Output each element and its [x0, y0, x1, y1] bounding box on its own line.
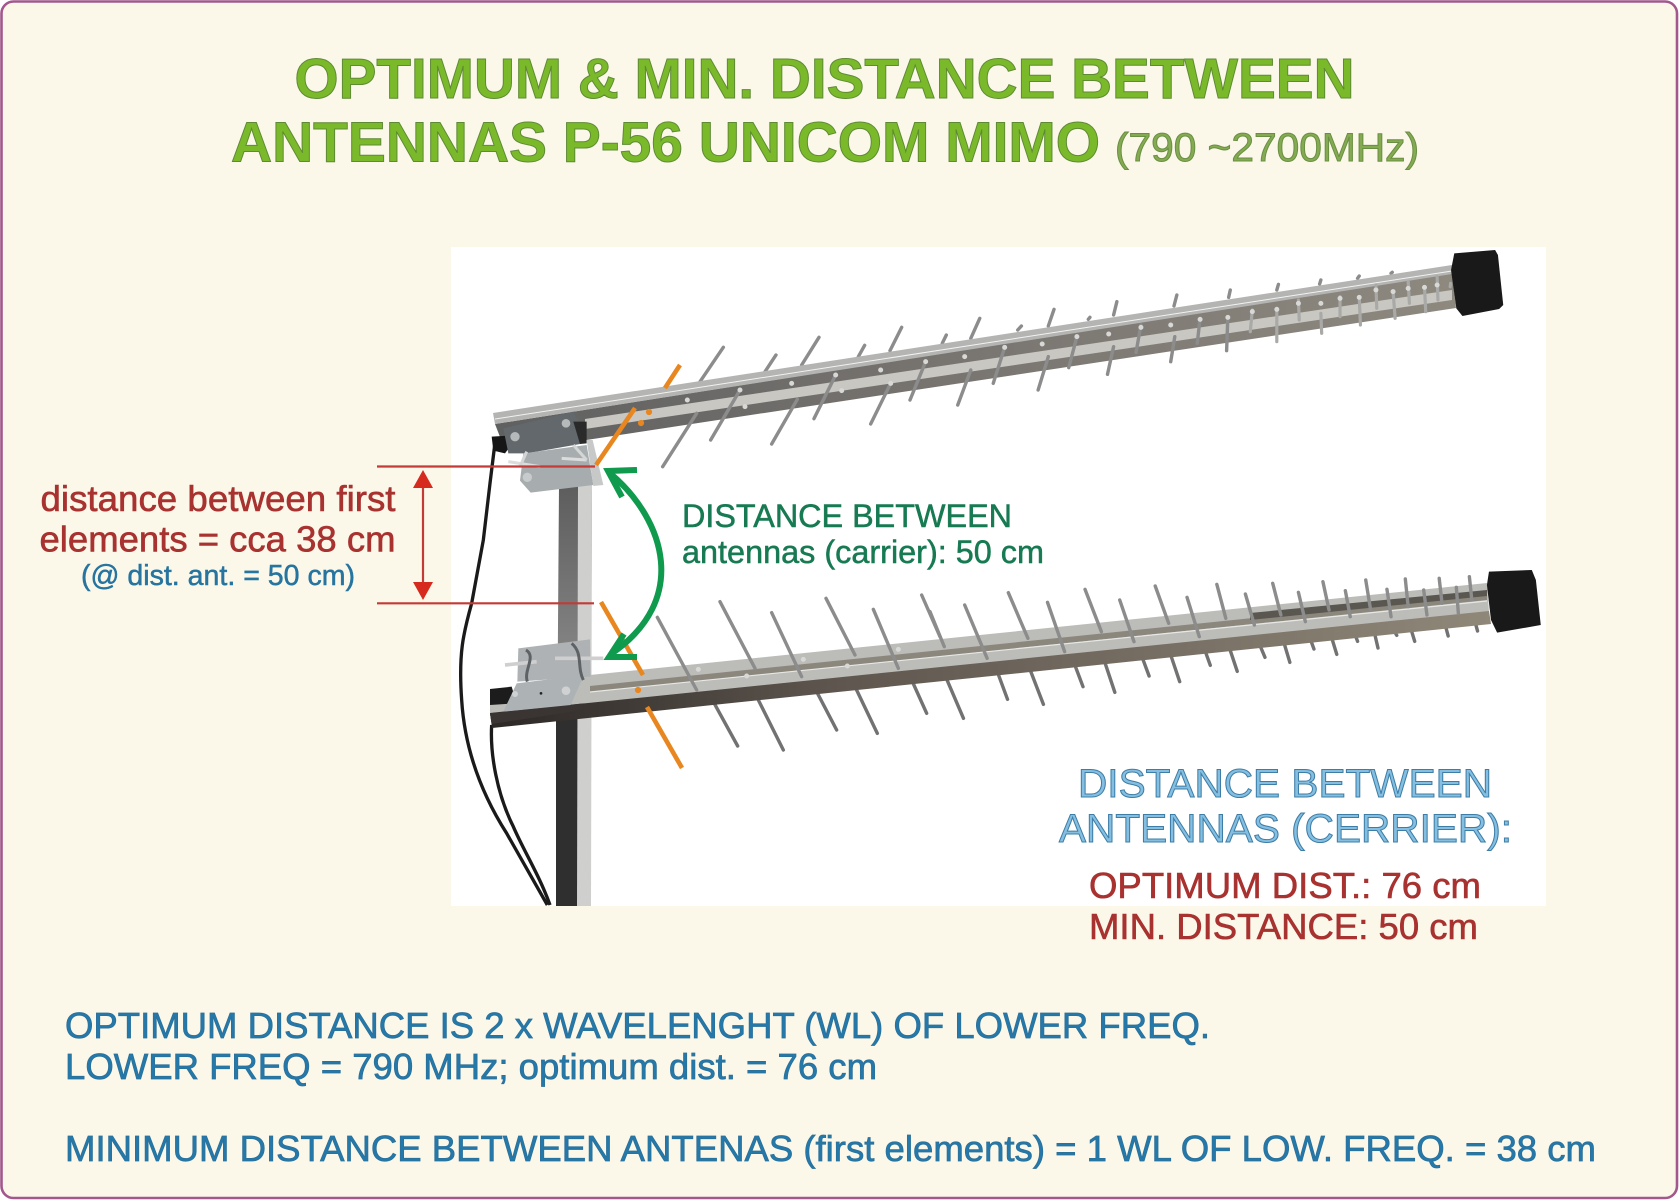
text block: explanation: MINIMUM DISTANCE BETWEEN ANTENAS (first elements) = 1 WL OF LOW. FREQ. = 38 cm: [65, 1128, 1596, 1169]
label: optimum and minimum distance: MIN. DISTANCE: 50 cm: [1089, 906, 1478, 947]
label: distance between antennas carrier: [1059, 762, 1512, 851]
title: (790 ~2700MHz): [1115, 126, 1419, 170]
label: distance between first elements: (@ dist. ant. = 50 cm): [81, 560, 355, 592]
bottom antenna: [490, 570, 1541, 750]
upper elements of bottom antenna: [657, 577, 1472, 690]
front elements of top antenna: [663, 277, 1451, 467]
text block: explanation: OPTIMUM DISTANCE IS 2 x WAVELENGHT (WL) OF LOWER FREQ.: [65, 1005, 1210, 1046]
orange marker: first element of bottom antenna: [601, 602, 682, 768]
back elements of top antenna: [700, 272, 1392, 382]
green curved double arrow: [608, 470, 661, 657]
boom of top antenna: [493, 265, 1456, 450]
label: distance between antennas carrier: DISTANCE BETWEEN: [1078, 762, 1492, 806]
label: distance between first elements: distance between first: [40, 478, 396, 519]
top antenna: [492, 250, 1503, 493]
text block: explanation: [65, 1005, 1596, 1169]
title: [231, 47, 1419, 174]
title: ANTENNAS P-56 UNICOM MIMO: [231, 110, 1100, 174]
label: optimum and minimum distance: [1089, 865, 1481, 947]
panel: antenna photo: [451, 247, 1546, 906]
mast: [556, 485, 592, 906]
boom of bottom antenna: [490, 583, 1491, 728]
label: distance between first elements: elements = cca 38 cm: [40, 518, 396, 560]
bottom bracket: [490, 639, 603, 724]
top end cap: [1451, 250, 1503, 316]
label: distance between antennas 50 cm: DISTANCE BETWEEN: [682, 498, 1012, 534]
bottom end cap: [1487, 570, 1541, 633]
top bracket: [492, 412, 603, 493]
lower elements of bottom antenna: [713, 625, 1478, 750]
orange marker: first element of top antenna: [596, 365, 680, 465]
label: optimum and minimum distance: OPTIMUM DIST.: 76 cm: [1089, 865, 1481, 906]
red reference lines and double arrow: [377, 466, 595, 603]
title: OPTIMUM & MIN. DISTANCE BETWEEN: [294, 47, 1354, 111]
label: distance between first elements: [40, 478, 396, 592]
text block: explanation: LOWER FREQ = 790 MHz; optimum dist. = 76 cm: [65, 1046, 877, 1087]
cables: [461, 440, 550, 905]
label: distance between antennas 50 cm: antennas (carrier): 50 cm: [682, 534, 1044, 570]
label: distance between antennas 50 cm: [682, 498, 1044, 570]
label: distance between antennas carrier: ANTENNAS (CERRIER):: [1059, 807, 1512, 851]
